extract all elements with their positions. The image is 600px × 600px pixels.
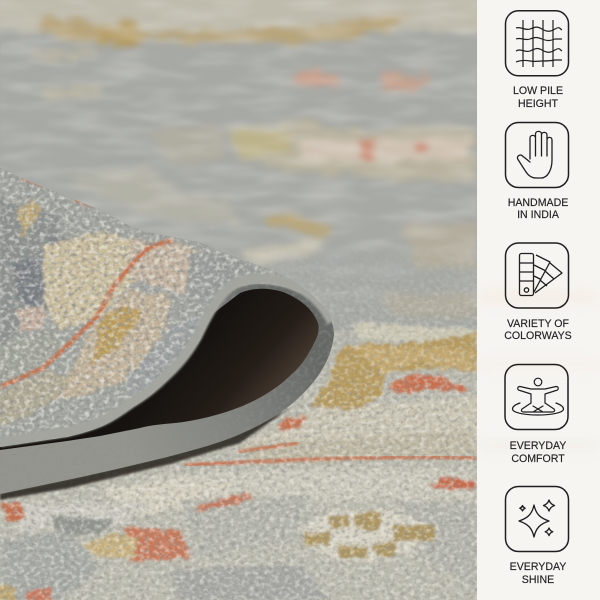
feature: variety of colorways: COLORWAYS <box>504 330 572 342</box>
long orange border line <box>185 457 476 465</box>
gold floor motif <box>310 332 476 410</box>
side panel <box>477 0 600 600</box>
icon: meditating person <box>505 364 568 430</box>
weave streaks and loops <box>0 0 476 274</box>
feature: handmade in india: IN INDIA <box>517 209 560 221</box>
cream bands <box>244 396 477 446</box>
feature: low pile height: HEIGHT <box>518 98 559 110</box>
shadow under rolled rug <box>0 408 290 500</box>
feature: variety of colorways <box>504 243 572 342</box>
gray patches <box>0 530 100 600</box>
icon: sparkles <box>506 486 568 552</box>
icon: pile threads <box>506 11 568 76</box>
rug inner shadow <box>0 289 319 450</box>
label: LOW PILE <box>513 85 563 97</box>
feature: everyday comfort: COMFORT <box>511 453 565 465</box>
feature: handmade in india <box>506 122 568 221</box>
feature: everyday shine <box>506 486 568 586</box>
rug band weave <box>231 285 334 426</box>
feature: low pile height <box>506 11 568 110</box>
rolled rug corner <box>0 160 340 500</box>
rug lower layer band <box>0 160 340 500</box>
orange accents <box>278 417 306 429</box>
feature: everyday comfort <box>505 364 568 465</box>
light front ridge of the fold <box>0 279 332 442</box>
icon: hand <box>506 122 568 188</box>
label: EVERYDAY <box>510 440 566 452</box>
orange border line on rug <box>0 240 173 387</box>
label: HANDMADE <box>508 197 568 209</box>
near rug, in focus <box>0 322 490 600</box>
label: VARIETY OF <box>507 318 570 330</box>
top face of rug <box>0 168 316 447</box>
label: EVERYDAY <box>510 561 566 573</box>
feature: everyday shine: SHINE <box>522 574 554 586</box>
icon: colour swatch fan <box>506 243 568 308</box>
small flower motif <box>298 508 440 562</box>
far rug, out of focus <box>0 0 500 320</box>
